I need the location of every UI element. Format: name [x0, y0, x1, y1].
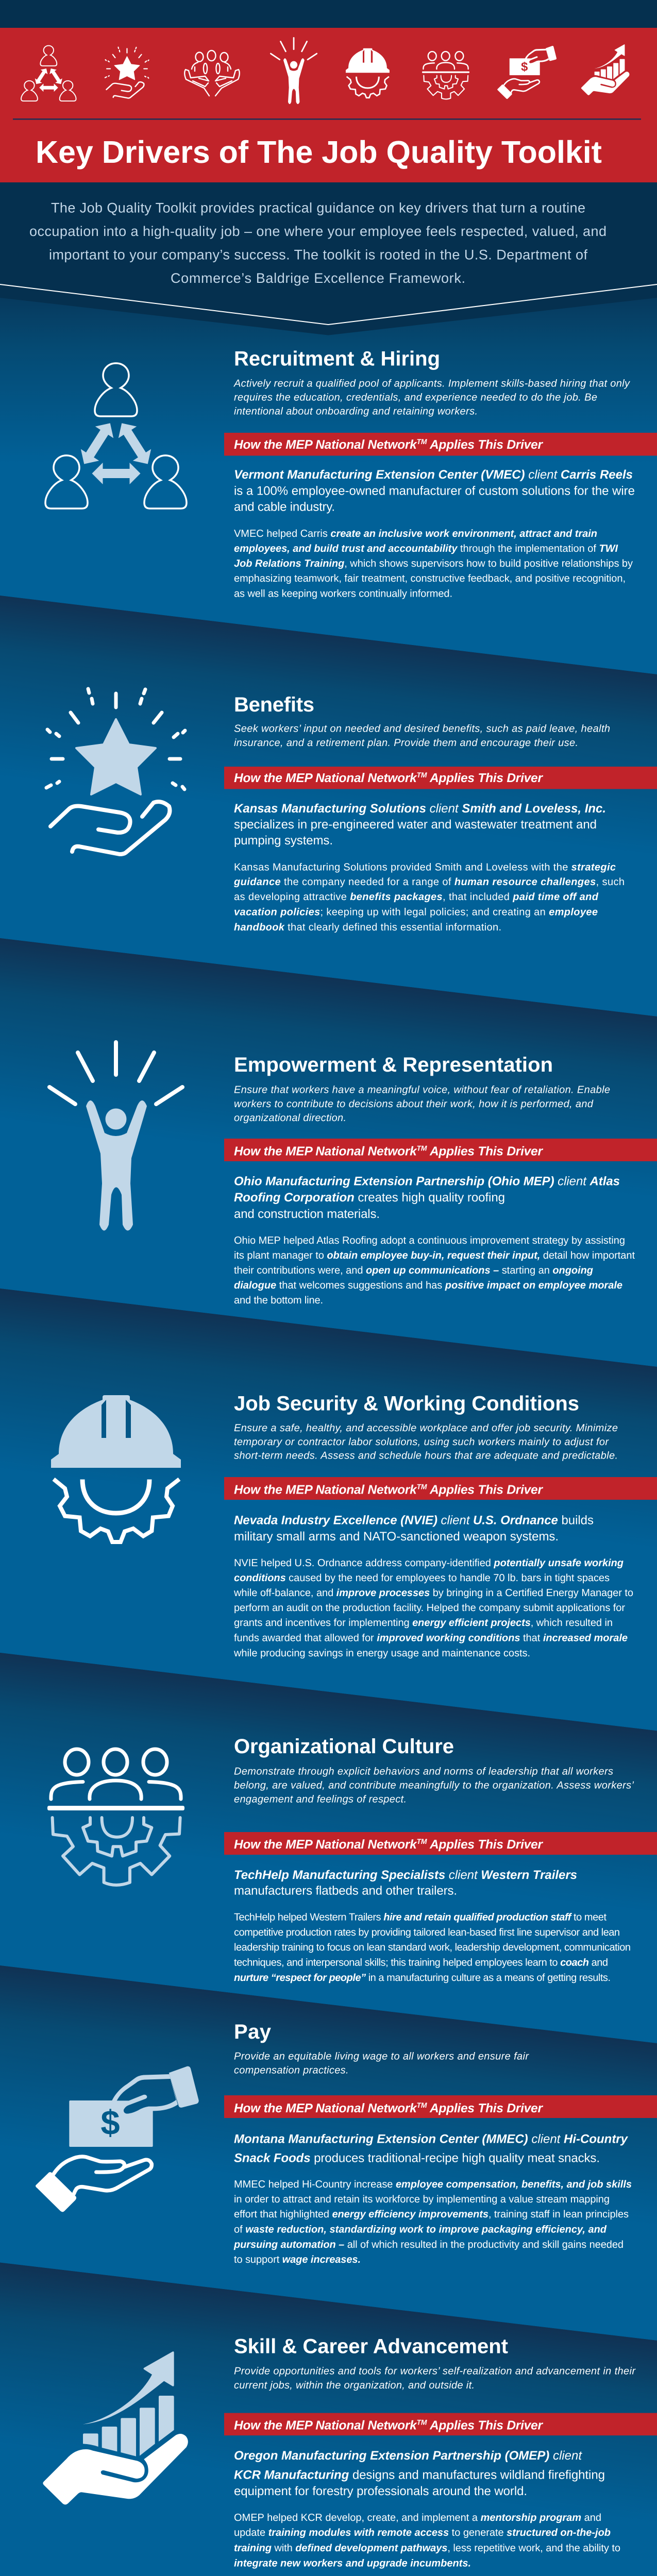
red bar: how MEP applies [224, 1832, 657, 1855]
heading: Pay [234, 2021, 272, 2043]
case story: while off-balance, and improve processes by bringing in a Certified Energy Manager to [233, 1587, 633, 1599]
client intro: is a 100% employee-owned manufacturer of custom solutions for the wire [234, 484, 635, 498]
case story: emphasizing teamwork, fair treatment, constructive feedback, and positive recognition, [234, 573, 626, 584]
red bar: how MEP applies: How the MEP National Network [234, 438, 417, 452]
panel: red header banner [0, 28, 657, 182]
red bar: how MEP applies [224, 1139, 657, 1161]
title: Key Drivers of The Job Quality Toolkit [36, 134, 602, 170]
icon: hard hat and gear [51, 1395, 181, 1542]
client intro: Ohio Manufacturing Extension Partnership (Ohio MEP) client Atlas [234, 1175, 620, 1188]
case story: Kansas Manufacturing Solutions provided Smith and Loveless with the strategic [234, 861, 616, 873]
icon row [21, 38, 629, 104]
client intro: manufacturers flatbeds and other trailers. [234, 1884, 457, 1898]
red bar: how MEP applies: How the MEP National Network [234, 1838, 417, 1852]
case story: effort that highlighted energy efficiency improvements, training staff in lean principles [234, 2209, 629, 2220]
icon: money exchanged between hands [497, 46, 557, 99]
driver description: insurance, and a retirement plan. Provide them and encourage their use. [234, 737, 578, 749]
icon: hard hat and gear [346, 48, 390, 98]
red bar: how MEP applies: Applies This Driver [427, 2102, 543, 2115]
heading: Benefits [234, 693, 314, 716]
client intro [234, 2449, 605, 2498]
red bar: how MEP applies: Applies This Driver [427, 1145, 543, 1158]
heading: Skill & Career Advancement [234, 2335, 508, 2358]
client intro: Kansas Manufacturing Solutions client Smith and Loveless, Inc. [234, 802, 606, 816]
driver description: temporary or contractor labor solutions, using such workers mainly to adjust for [234, 1436, 609, 1448]
case story: competitive production rates by providing tailored lean-based first line supervisor and lean [234, 1927, 620, 1938]
red bar: how MEP applies: How the MEP National Network [234, 1145, 417, 1158]
case story: techniques, and interpersonal skills; this training helped employees learn to coach and [234, 1957, 608, 1968]
case story: funds awarded that allowed for improved working conditions that increased morale [234, 1632, 628, 1643]
icon: figure with raised arms [49, 1042, 182, 1230]
heading: Recruitment & Hiring [234, 348, 440, 370]
case story [234, 2512, 620, 2569]
red bar: how MEP applies: How the MEP National Network [234, 771, 417, 785]
client intro: KCR Manufacturing designs and manufactures wildland firefighting [234, 2468, 605, 2482]
case story: as well as keeping workers continually informed. [234, 588, 452, 600]
client intro: Snack Foods produces traditional-recipe high quality meat snacks. [234, 2151, 600, 2165]
red bar: how MEP applies [224, 2413, 657, 2435]
case story [234, 1911, 631, 1984]
case story: nurture “respect for people” in a manufacturing culture as a means of getting results. [234, 1972, 611, 1984]
driver description [234, 1766, 634, 1805]
driver description: engagement and feelings of respect. [234, 1793, 407, 1805]
red bar: how MEP applies: Applies This Driver [427, 1838, 543, 1852]
case story: integrate new workers and upgrade incumbents. [234, 2557, 471, 2569]
red bar: how MEP applies: TM [417, 771, 427, 779]
case story: grants and incentives for implementing energy efficient projects, which resulted in [234, 1617, 613, 1629]
icon: team and gears [47, 1749, 184, 1885]
case story: its plant manager to obtain employee buy-in, request their input, detail how important [234, 1250, 635, 1261]
case story: pursuing automation – all of which resulted in the productivity and skill gains needed [233, 2239, 624, 2250]
panel: skill and career advancement [43, 2335, 657, 2569]
heading: Empowerment & Representation [234, 1054, 553, 1076]
driver description [234, 723, 610, 749]
driver description: Provide opportunities and tools for workers’ self-realization and advancement in their [234, 2366, 636, 2377]
case story: leadership training to focus on lean standard work, leadership development, communication [234, 1942, 631, 1953]
driver description: Actively recruit a qualified pool of applicants. Implement skills-based hiring that only [233, 378, 630, 389]
client intro: Montana Manufacturing Extension Center (MMEC) client Hi-Country [234, 2132, 629, 2146]
client intro [234, 468, 635, 514]
case story: Job Relations Training, which shows supervisors how to build positive relationships by [234, 558, 633, 569]
intro text: important to your company’s success. The toolkit is rooted in the U.S. Department of [49, 247, 587, 263]
red bar: how MEP applies: How the MEP National Network [234, 2419, 417, 2433]
driver description [234, 2366, 636, 2391]
panel: pay [36, 2021, 657, 2265]
case story: employees, and build trust and accountability through the implementation of TWI [234, 543, 618, 554]
heading: Job Security & Working Conditions [234, 1392, 579, 1415]
intro text: occupation into a high-quality job – one where your employee feels respected, valued, and [29, 224, 607, 239]
case story: handbook that clearly defined this essential information. [234, 922, 501, 933]
case story: dialogue that welcomes suggestions and has positive impact on employee morale [234, 1280, 622, 1291]
client intro: Nevada Industry Excellence (NVIE) client U.S. Ordnance builds [234, 1514, 594, 1528]
red bar: how MEP applies: TM [417, 1837, 427, 1845]
panel: recruitment and hiring [45, 348, 657, 600]
panel: job security and working conditions [51, 1392, 657, 1659]
case story: their contributions were, and open up communications – starting an ongoing [234, 1265, 593, 1276]
driver description: current jobs, within the organization, and outside it. [234, 2380, 475, 2391]
case story: and the bottom line. [234, 1295, 323, 1306]
red bar: how MEP applies: How the MEP National Network [234, 1483, 417, 1497]
driver description: belong, are valued, and contribute meaningfully to the organization. Assess workers’ [234, 1780, 634, 1791]
case story: OMEP helped KCR develop, create, and implement a mentorship program and [234, 2512, 601, 2523]
client intro: equipment for forestry professionals around the world. [234, 2484, 527, 2498]
case story: guidance the company needed for a range of human resource challenges, such [233, 876, 625, 888]
driver description: Provide an equitable living wage to all workers and ensure fair [234, 2051, 529, 2062]
driver description [234, 1422, 618, 1461]
client intro [234, 1514, 594, 1544]
case story [233, 1557, 633, 1659]
case story [234, 1235, 635, 1306]
case story: conditions caused by the need for employees to handle 70 lb. bars in tight spaces [234, 1572, 610, 1584]
case story: VMEC helped Carris create an inclusive work environment, attract and train [234, 528, 597, 539]
case story: to support wage increases. [234, 2254, 361, 2265]
icon: star over hand [105, 47, 149, 98]
intro text: Commerce’s Baldrige Excellence Framework. [171, 270, 465, 286]
client intro [234, 1175, 620, 1221]
case story [233, 2179, 632, 2265]
case story: update training modules with remote access to generate structured on-the-job [234, 2527, 611, 2538]
icon: money exchanged between hands: $ [521, 60, 528, 74]
case story: of waste reduction, standardizing work to improve packaging efficiency, and [234, 2224, 607, 2235]
red bar: how MEP applies: Applies This Driver [427, 1483, 543, 1497]
client intro: pumping systems. [234, 834, 333, 848]
driver description: requires the education, credentials, and experience needed to do the job. Be [234, 392, 597, 403]
red bar: how MEP applies [224, 767, 657, 789]
driver description: Seek workers’ input on needed and desired benefits, such as paid leave, health [234, 723, 610, 735]
client intro: military small arms and NATO-sanctioned weapon systems. [234, 1530, 559, 1544]
red bar: how MEP applies [224, 433, 657, 455]
icon: figure with raised arms [271, 38, 317, 104]
panel: empowerment and representation [49, 1042, 657, 1306]
driver description: short-term needs. Assess and schedule hours that are adequate and predictable. [234, 1450, 618, 1461]
case story [233, 861, 625, 933]
driver description: workers to contribute to decisions about their work, how it is performed, and [234, 1098, 594, 1110]
client intro [234, 802, 606, 848]
red bar: how MEP applies: Applies This Driver [427, 771, 543, 785]
client intro: Oregon Manufacturing Extension Partnership (OMEP) client [234, 2449, 582, 2463]
intro text [29, 200, 607, 286]
driver description: Ensure that workers have a meaningful voice, without fear of retaliation. Enable [234, 1084, 610, 1095]
case story: TechHelp helped Western Trailers hire and retain qualified production staff to meet [234, 1911, 607, 1923]
case story: in order to attract and retain its workforce by implementing a value stream mapping [234, 2194, 610, 2205]
red bar: how MEP applies: Applies This Driver [427, 2419, 543, 2433]
client intro: specializes in pre-engineered water and wastewater treatment and [234, 818, 597, 832]
heading: Organizational Culture [234, 1735, 454, 1758]
red bar: how MEP applies [224, 1477, 657, 1500]
case story: MMEC helped Hi-Country increase employee compensation, benefits, and job skills [234, 2179, 632, 2190]
client intro [234, 1868, 577, 1898]
case story: training with defined development pathways, less repetitive work, and the ability to [234, 2543, 620, 2554]
red bar: how MEP applies: TM [417, 437, 427, 446]
driver description: Demonstrate through explicit behaviors and norms of leadership that all workers [234, 1766, 613, 1777]
driver description: Ensure a safe, healthy, and accessible workplace and offer job security. Minimize [234, 1422, 618, 1434]
icon: growth bars in hand [43, 2351, 188, 2504]
icon: hands holding people [184, 50, 240, 96]
driver description: compensation practices. [234, 2065, 348, 2076]
icon: growth bars in hand [581, 44, 629, 95]
icon: recruitment people triangle [21, 46, 76, 101]
driver description [233, 378, 630, 417]
icon: money exchanged between hands: $ [100, 2104, 120, 2142]
client intro: Vermont Manufacturing Extension Center (VMEC) client Carris Reels [234, 468, 633, 482]
driver description: organizational direction. [234, 1112, 346, 1124]
case story: Ohio MEP helped Atlas Roofing adopt a continuous improvement strategy by assisting [234, 1235, 625, 1246]
client intro: Roofing Corporation creates high quality roofing [234, 1191, 505, 1205]
red bar: how MEP applies: How the MEP National Network [234, 2102, 417, 2115]
case story: vacation policies; keeping up with legal policies; and creating an employee [234, 907, 598, 918]
driver description [234, 1084, 610, 1124]
client intro: and construction materials. [234, 1207, 380, 1221]
icon: team and gears [422, 52, 469, 99]
red bar: how MEP applies: Applies This Driver [427, 438, 543, 452]
icon: people triangle [45, 363, 187, 509]
client intro: and cable industry. [234, 500, 335, 514]
case story: perform an audit on the production facility. Helped the company submit applications for [234, 1602, 625, 1614]
case story: as developing attractive benefits packages, that included paid time off and [234, 891, 599, 903]
red bar: how MEP applies: TM [417, 1144, 427, 1152]
red bar: how MEP applies: TM [417, 1483, 427, 1491]
case story: NVIE helped U.S. Ordnance address company-identified potentially unsafe working [234, 1557, 624, 1569]
red bar: how MEP applies [224, 2095, 657, 2118]
intro text: The Job Quality Toolkit provides practical guidance on key drivers that turn a routine [51, 200, 585, 215]
icon: money exchanged between hands [36, 2066, 199, 2212]
client intro: TechHelp Manufacturing Specialists client Western Trailers [234, 1868, 577, 1882]
red bar: how MEP applies: TM [417, 2101, 427, 2109]
client intro [234, 2132, 629, 2165]
driver description: intentional about onboarding and retaining workers. [234, 406, 478, 417]
panel: benefits [46, 689, 657, 933]
icon: star over hand [46, 689, 185, 854]
case story [234, 528, 633, 600]
driver description [234, 2051, 529, 2076]
red bar: how MEP applies: TM [417, 2418, 427, 2427]
case story: while producing savings in energy usage and maintenance costs. [233, 1648, 530, 1659]
panel: organizational culture [47, 1735, 657, 1984]
